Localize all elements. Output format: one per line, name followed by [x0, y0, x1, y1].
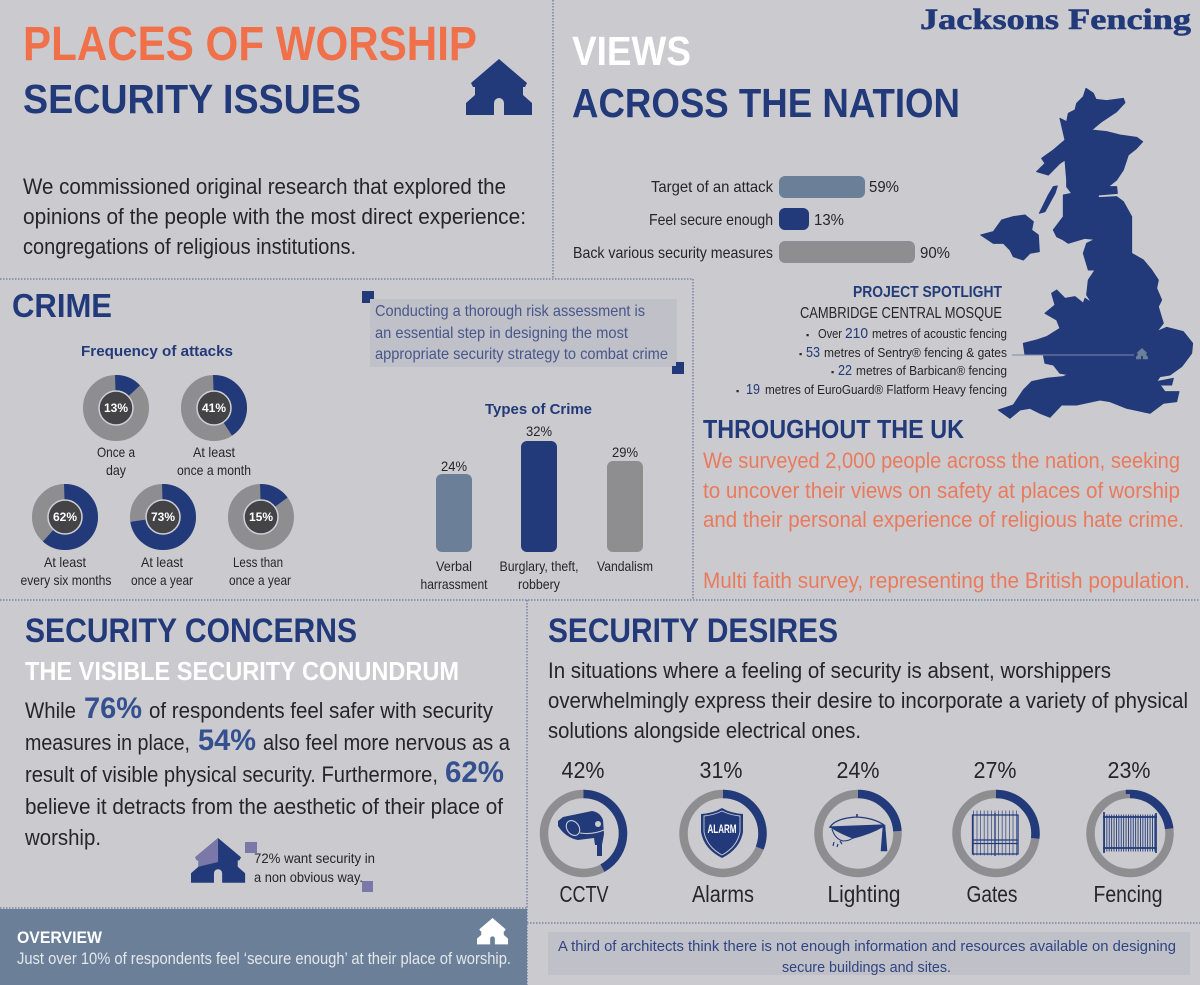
icon: alarm shield: [701, 808, 743, 858]
icon: CCTV camera: [558, 811, 604, 856]
body text: 62%: [445, 756, 504, 789]
bar chart: types of crime: Vandalism: [597, 558, 653, 574]
project spotlight: ▪: [736, 386, 739, 396]
metric: Fencing 23%: [1090, 757, 1170, 907]
desires text: solutions alongside electrical ones.: [548, 718, 861, 743]
donut: 13% once a day: 13%: [104, 401, 128, 415]
icon: security light: [830, 814, 887, 851]
callout: architects: secure buildings and sites.: [782, 959, 951, 976]
intro text: We commissioned original research that explored the: [23, 174, 506, 199]
project spotlight: 19: [746, 381, 760, 398]
metric: Gates 27%: 27%: [974, 757, 1016, 783]
subheading: visible security conundrum: THE VISIBLE SECURITY CONUNDRUM: [25, 656, 459, 686]
donut: 13% once a day: [92, 384, 140, 478]
callout: risk assessment: Conducting a thorough risk assessment is: [375, 303, 645, 320]
panel: security concerns: [24, 612, 510, 892]
bar chart: types of crime: 24%: [441, 458, 467, 474]
intro text: [23, 174, 526, 259]
bar chart: views: Feel secure enough: [649, 212, 773, 229]
bar chart: types of crime: Verbal: [436, 558, 472, 574]
icon: fencing: [1103, 812, 1157, 853]
body text: result of visible physical security. Furthermore,: [25, 762, 438, 787]
survey text: [703, 448, 1190, 593]
bar chart: views: 90%: [920, 245, 950, 262]
donut: 73% at least once a year: At least: [141, 554, 183, 570]
donut: 41% at least once a month: At least: [193, 444, 235, 460]
project spotlight: 53: [806, 344, 820, 361]
heading: crime: CRIME: [12, 287, 112, 324]
heading: security concerns: SECURITY CONCERNS: [25, 612, 357, 650]
donut: 73% at least once a year: [131, 492, 193, 588]
body text: believe it detracts from the aesthetic of their place of: [25, 794, 504, 819]
metric: CCTV 42%: [544, 757, 623, 907]
bar chart: types of crime: [420, 401, 653, 592]
bar chart: types of crime: harrassment: [420, 576, 488, 592]
metric: Alarms 31%: [684, 757, 762, 907]
project spotlight: 210: [845, 325, 868, 342]
donut: 62% at least every six months: At least: [44, 554, 86, 570]
donut: 41% at least once a month: once a month: [177, 462, 251, 478]
project spotlight: PROJECT SPOTLIGHT: [853, 284, 1002, 301]
title: PLACES OF WORSHIP: [23, 18, 477, 71]
donut: 41% at least once a month: 41%: [202, 401, 226, 415]
metric: Lighting 24%: 24%: [836, 757, 880, 783]
bar chart: views: 59%: [869, 179, 899, 196]
icon: house: [466, 59, 532, 115]
donut: 62% at least every six months: 62%: [53, 510, 77, 524]
panel: overview: [0, 908, 527, 985]
donut: 73% at least once a year: 73%: [151, 510, 175, 524]
body text: also feel more nervous as a: [263, 730, 510, 755]
project spotlight: metres of Barbican® fencing: [856, 363, 1007, 378]
heading: security desires: SECURITY DESIRES: [548, 612, 838, 650]
bar chart: views: [573, 176, 950, 263]
donut: 15% less than once a year: once a year: [229, 572, 291, 588]
metric: Lighting 24%: Lighting: [828, 881, 900, 907]
body text: measures in place,: [25, 730, 190, 755]
body text: [24, 692, 510, 850]
donut: 62% at least every six months: every six months: [20, 572, 112, 588]
panel: security desires: [544, 612, 1190, 976]
callout: risk assessment: [362, 291, 684, 374]
donut: 15% less than once a year: 15%: [249, 510, 273, 524]
body text: of respondents feel safer with security: [149, 698, 494, 723]
bar chart: types of crime: Burglary, theft,: [500, 558, 578, 574]
donut: 62% at least every six months: [20, 492, 112, 588]
metric: Fencing 23%: 23%: [1108, 757, 1150, 783]
project spotlight: ▪: [799, 349, 802, 359]
metric: CCTV 42%: CCTV: [560, 881, 609, 907]
callout: 72% non obvious security: [245, 842, 375, 892]
logo: Jacksons Fencing: Jacksons Fencing: [920, 3, 1191, 36]
intro text: congregations of religious institutions.: [23, 234, 356, 259]
project spotlight: Over: [818, 326, 843, 341]
map marker: Cambridge: [1012, 348, 1148, 359]
subtitle: SECURITY ISSUES: [23, 76, 361, 122]
icon: gates: [972, 813, 1018, 856]
callout: architects: A third of architects think there is not enough information and resources available on designing: [558, 938, 1176, 955]
overview heading: OVERVIEW: [17, 928, 103, 947]
project spotlight: ▪: [831, 367, 834, 377]
bar chart: types of crime: Types of Crime: [485, 401, 592, 418]
callout: architects: [548, 932, 1190, 976]
project spotlight: metres of Sentry® fencing & gates: [824, 345, 1007, 360]
bar chart: types of crime: 29%: [612, 444, 638, 460]
callout: risk assessment: appropriate security strategy to combat crime: [375, 346, 668, 363]
panel: crime: [12, 287, 684, 592]
metric: Gates 27%: [956, 757, 1036, 907]
body text: 54%: [198, 724, 256, 757]
body text: worship.: [24, 825, 101, 850]
callout: risk assessment: an essential step in designing the most: [375, 325, 629, 342]
bar chart: views: Target of an attack: [651, 179, 774, 196]
callout: 72% non obvious security: a non obvious way.: [254, 869, 363, 885]
project spotlight: metres of acoustic fencing: [872, 326, 1007, 341]
donut: 15% less than once a year: Less than: [233, 554, 283, 570]
metric: Alarms 31%: Alarms: [692, 881, 754, 907]
map: United Kingdom: [981, 88, 1193, 418]
project spotlight: [736, 284, 1007, 398]
heading: throughout the UK: THROUGHOUT THE UK: [703, 414, 964, 444]
metric: CCTV 42%: 42%: [562, 757, 604, 783]
desires text: In situations where a feeling of security is absent, worshippers: [548, 658, 1111, 683]
project spotlight: 22: [838, 362, 852, 379]
bar chart: views: 13%: [814, 212, 844, 229]
bar chart: types of crime: robbery: [518, 576, 560, 592]
icon: white house: [477, 918, 508, 944]
donut: 41% at least once a month: [177, 384, 251, 478]
desires text: [548, 658, 1188, 743]
donut: 13% once a day: Once a: [97, 444, 135, 460]
callout: 72% non obvious security: 72% want security in: [254, 850, 375, 866]
metric: Alarms 31%: 31%: [700, 757, 742, 783]
overview text: Just over 10% of respondents feel ‘secure enough’ at their place of worship.: [17, 950, 511, 968]
panel: title and intro: [23, 18, 532, 259]
heading: frequency of attacks: Frequency of attacks: [81, 343, 233, 360]
donut: 15% less than once a year: [229, 492, 291, 588]
icon: alarm shield: ALARM: [708, 822, 736, 836]
bar chart: types of crime: 32%: [526, 423, 552, 439]
intro text: opinions of the people with the most direct experience:: [23, 204, 526, 229]
donut: 13% once a day: day: [106, 462, 126, 478]
project spotlight: ▪: [806, 330, 809, 340]
project spotlight: metres of EuroGuard® Flatform Heavy fencing: [765, 382, 1007, 397]
heading: views: VIEWS: [572, 28, 691, 74]
body text: 76%: [84, 692, 142, 725]
project spotlight: CAMBRIDGE CENTRAL MOSQUE: [800, 305, 1002, 322]
metric: Fencing 23%: Fencing: [1094, 881, 1162, 907]
body text: While: [25, 698, 76, 723]
heading: across the nation: ACROSS THE NATION: [572, 80, 960, 126]
bar chart: views: Back various security measures: [573, 245, 773, 262]
donut: 73% at least once a year: once a year: [131, 572, 193, 588]
panel: views across the nation: [572, 28, 1193, 593]
metric: Lighting 24%: [818, 757, 900, 907]
icon: half-hidden house: [191, 838, 245, 883]
metric: Gates 27%: Gates: [966, 881, 1018, 907]
